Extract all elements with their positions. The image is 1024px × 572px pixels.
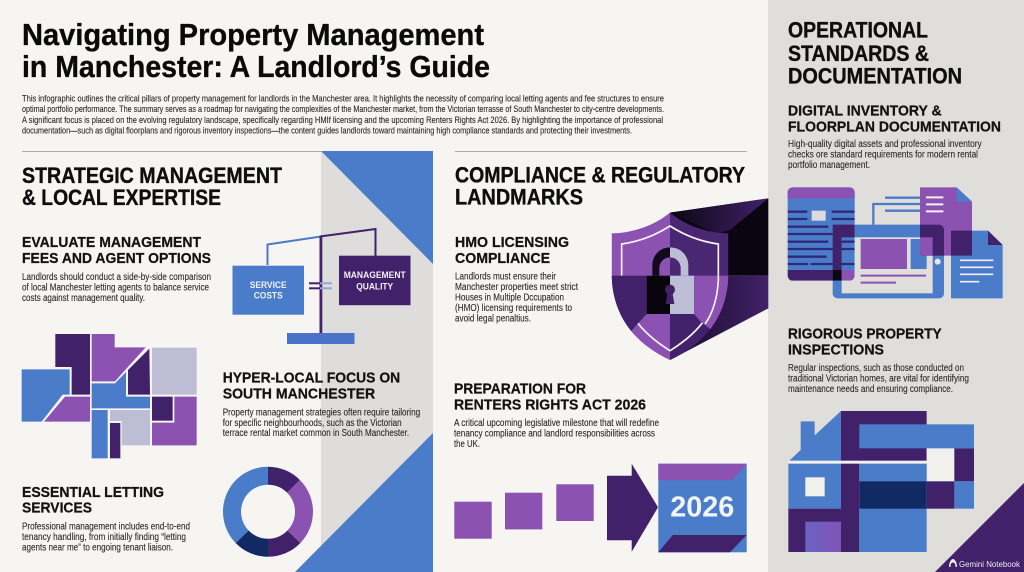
heading: operational standards: STANDARDS & [788, 41, 929, 66]
donut chart [232, 476, 304, 548]
title: Navigating Property Management [22, 17, 484, 52]
block: digital inventory: portfolio management. [788, 160, 870, 171]
block: essential letting services: agents near me” to engoing tenant liaison. [22, 543, 173, 554]
icon: victorian house [788, 411, 974, 552]
block: evaluate management fees: costs against management quality. [22, 293, 145, 304]
block: evaluate management fees [22, 234, 211, 304]
corner badge: Gemini Notebook [959, 559, 1021, 569]
block: renters rights act: RENTERS RIGHTS ACT 2026 [454, 396, 646, 413]
block: hyper-local focus: SOUTH MANCHESTER [223, 385, 375, 402]
summary text block: A significant focus is placed on the evolving regulatory landscape, specifically regarding HMIf licensing and the upcoming Renters Rights Act 2026. By highlighting the importance of professional [22, 115, 663, 126]
block: digital inventory: FLOORPLAN DOCUMENTATION [788, 118, 1001, 135]
block: evaluate management fees: of local Manchester letting agents to balance service [22, 282, 209, 294]
panel: compliance and regulatory landmarks [454, 163, 768, 552]
summary text block: documentation—such as digital floorplans and rigorous inventory inspections—the content guides landlords toward maintaining high compliance standards and protecting their investments. [22, 125, 632, 136]
panel: operational standards [788, 17, 1024, 572]
heading: compliance [455, 163, 745, 209]
heading: compliance: LANDMARKS [455, 184, 583, 209]
block: rigorous inspections [788, 325, 969, 395]
block: HMO licensing: Houses in Multiple Dccupation [455, 292, 564, 304]
heading: compliance: COMPLIANCE & REGULATORY [455, 163, 745, 188]
block: HMO licensing [455, 234, 578, 324]
heading: strategic management: STRATEGIC MANAGEMENT [22, 163, 283, 188]
step squares [454, 484, 594, 539]
block: essential letting services [22, 484, 190, 554]
title: in Manchester: A Landlord’s Guide [22, 49, 490, 84]
block: renters rights act: PREPARATION FOR [454, 380, 586, 397]
block: evaluate management fees: FEES AND AGENT OPTIONS [22, 250, 211, 267]
timeline: squares, arrow and 2026 calendar [454, 464, 747, 552]
block: hyper-local focus: for specific neighbourhoods, such as the Victorian [223, 418, 402, 429]
block: HMO licensing: Landlords must ensure their [455, 272, 557, 282]
block: rigorous inspections: INSPECTIONS [788, 341, 884, 358]
panel: strategic management [22, 163, 420, 554]
block: HMO licensing: (HMO) licensing requirements to [455, 303, 572, 314]
block: rigorous inspections: traditional Victorian homes, are vital for identifying [788, 374, 969, 384]
corner badge [935, 483, 1024, 572]
block: renters rights act: tenancy compliance and landlord responsibilities across [454, 428, 655, 440]
block: digital inventory: checks ore standard requirements for modern rental [788, 150, 978, 160]
block: evaluate management fees: Landlords should conduct a side-by-side comparison [22, 272, 211, 283]
heading: operational standards [788, 17, 962, 88]
block: hyper-local focus: Property management strategies often require tailoring [223, 407, 420, 418]
block: hyper-local focus: HYPER-LOCAL FOCUS ON [223, 370, 400, 387]
icon: gemini mark [949, 559, 957, 567]
block: essential letting services: Professional management includes end-to-end [22, 522, 190, 533]
icon: digital documents [788, 187, 1003, 298]
block: HMO licensing: HMO LICENSING [455, 234, 569, 251]
block: evaluate management fees: EVALUATE MANAGEMENT [22, 234, 201, 251]
heading: operational standards: OPERATIONAL [788, 17, 928, 42]
heading: strategic management: & LOCAL EXPERTISE [22, 185, 221, 210]
icon: balance scale: QUALITY [356, 282, 394, 292]
block: HMO licensing: avoid legal penaltius. [455, 314, 531, 324]
heading: strategic management [22, 163, 283, 210]
arrow [607, 464, 658, 552]
block: renters rights act: the UK. [454, 439, 480, 450]
icon: balance scale: COSTS [254, 290, 283, 300]
icon: balance scale [232, 229, 410, 344]
icon: balance scale: SERVICE [250, 280, 287, 290]
block: essential letting services: SERVICES [22, 500, 92, 517]
summary text block: optimal portfolio performance. The summary serves as a roadmap for navigating the complexities of the Manchester market, from the Victorian terrasse of South Manchester to city-centre developments. [22, 104, 664, 115]
title [22, 17, 490, 84]
icon: shield with padlock [607, 198, 768, 362]
summary text block: This infographic outlines the critical pillars of property management for landlords in the Manchester area. It highlights the necessity of comparing local letting agents and fee structures to ensure [22, 94, 664, 104]
block: digital inventory: DIGITAL INVENTORY & [788, 103, 942, 120]
block: rigorous inspections: maintenance needs and ensuring compliance. [788, 384, 953, 395]
icon: balance scale: MANAGEMENT [344, 270, 406, 280]
summary text block [22, 94, 664, 136]
block: rigorous inspections: RIGOROUS PROPERTY [788, 325, 942, 342]
block: digital inventory: High-quality digital assets and professional inventory [788, 139, 982, 150]
block: renters rights act [454, 380, 659, 450]
block: rigorous inspections: Regular inspections, such as those conducted on [788, 363, 964, 374]
block: renters rights act: A critical upcoming legislative milestone that will redefine [454, 418, 659, 429]
icon: neighbourhood map [22, 334, 197, 458]
block: essential letting services: ESSENTIAL LETTING [22, 484, 164, 501]
block: digital inventory [788, 103, 1001, 171]
block: essential letting services: tenancy handling, from initially finding “letting [22, 532, 186, 543]
block: hyper-local focus [223, 370, 420, 439]
block: HMO licensing: COMPLIANCE [455, 250, 550, 267]
heading: operational standards: DOCUMENTATION [788, 63, 962, 88]
calendar 2026: 2026 [670, 492, 734, 524]
block: hyper-local focus: terrace rental market common in South Manchester. [223, 428, 409, 439]
calendar 2026 [658, 464, 747, 552]
block: HMO licensing: Manchester properties meet strict [455, 282, 578, 293]
